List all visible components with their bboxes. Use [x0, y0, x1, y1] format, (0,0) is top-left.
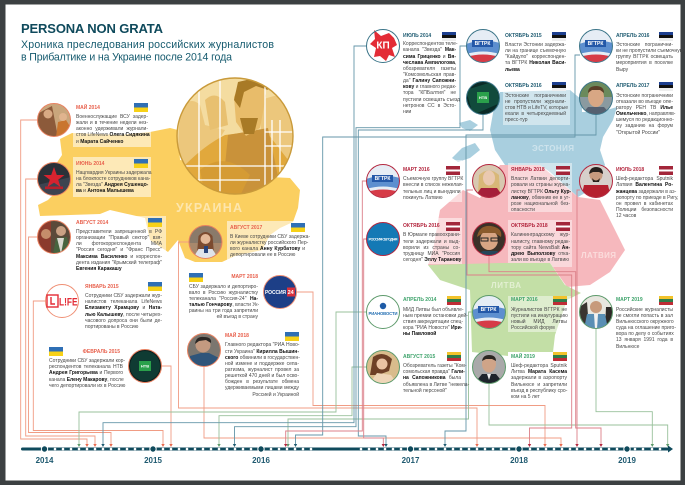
card: April 2014: МИД Литвы был объявле-: [403, 307, 464, 313]
photo: August 2015: [366, 350, 400, 384]
card: May 2018: Россией и Украиной: [252, 392, 299, 398]
card: May 2018: сти Украина" Кирилла Вышин-: [225, 349, 299, 355]
card: May 2014: стов LifeNews Олега Сидякина: [76, 132, 150, 138]
card: July 2018: Шеф-редактора Sputnik: [616, 176, 673, 182]
card: May 2018: ского обвинили в государствен-: [225, 355, 300, 361]
card: July 2018: Латвия Валентина Ро-: [616, 182, 673, 188]
card: October 2018: [511, 222, 570, 263]
card: February 2015: Андрея Григорьева и Первого: [49, 370, 123, 376]
card: March 2019: [616, 296, 676, 350]
card: May 2014: МАЙ 2014: [76, 104, 100, 110]
map labels: ЭСТОНИЯ: [532, 144, 574, 153]
card: May 2018: Главного редактора "РИА Ново-: [225, 342, 299, 348]
card: July 2014: тора "КПБалтия" не: [403, 90, 456, 96]
card: October 2018: зали во въезде в Латвию: [511, 257, 569, 263]
card: March 2016 Lithuania: пустили на инаугурацию: [511, 313, 568, 319]
card: January 2018: ЯНВАРЬ 2018: [511, 167, 545, 173]
card: March 2018: ей въезд в страну: [217, 314, 258, 320]
logo: Rossiya Segodnya: [366, 222, 400, 256]
card: August 2015: Обозреватель газеты "Ком-: [403, 363, 466, 369]
card: October 2015: ли на границе съемочную: [505, 48, 566, 54]
photo: Zvezda logo: [37, 162, 71, 196]
card: March 2016 Latvia: МАРТ 2016: [403, 167, 430, 173]
map: Ukraine: [38, 100, 307, 273]
card: May 2018: ной измене и поддержке сепа-: [225, 361, 299, 367]
card: March 2018: телеканала "Россия-24" На-: [189, 296, 258, 302]
card: August 2014: "Россия сегодня" и "Франс Пресс": [76, 247, 162, 253]
card: May 2014: аконно удерживали журнали-: [76, 126, 148, 132]
photo: July 2018: [579, 164, 613, 198]
photo: May 2018: [187, 333, 221, 367]
card: July 2018: 12 часов: [616, 213, 636, 219]
card: October 2018: Калининградскому жур-: [511, 232, 570, 238]
card: May 2019: Литва Марата Касема: [511, 369, 567, 375]
card: August 2017: [230, 223, 310, 258]
timeline: [22, 446, 673, 465]
card: April 2014: кора "РИА Новости" Ири-: [403, 325, 462, 331]
card: January 2018: опасности: [511, 207, 535, 213]
card: April 2016 Estonia: Эстонские погранични-: [616, 42, 673, 48]
card: April 2016 Estonia: АПРЕЛЬ 2016: [616, 33, 649, 39]
card: January 2018: листку ВГТРК Ольгу Кур-: [511, 188, 571, 194]
card: January 2015: Сотрудники СБУ задержали жур-: [85, 293, 162, 299]
card: August 2015: объявлена в Литве "нежела-: [403, 382, 469, 388]
card: March 2018: [189, 273, 259, 320]
card: June 2014: [76, 159, 152, 194]
card: August 2014: ли фотокорреспондента МИА: [76, 241, 162, 247]
card: January 2015: [85, 282, 162, 330]
card: August 2014: АВГУСТ 2014: [76, 220, 108, 226]
card: October 2016 Estonia: ОКТЯБРЬ 2016: [505, 83, 542, 89]
photo: March 2019: [579, 295, 613, 329]
card: October 2015: льева: [505, 67, 520, 73]
card: July 2014: сима Гриценко и Вя-: [403, 54, 456, 60]
map labels: ЛАТВИЯ: [581, 251, 616, 260]
logo: Russia 24: [264, 276, 296, 308]
card: March 2019: не смогли попасть в зал: [616, 313, 673, 319]
logo: VGTRK March 2016 Lithuania: ВГТРК: [481, 307, 497, 313]
card: March 2016 Lithuania: [511, 296, 568, 331]
photo: October 2018: [472, 222, 506, 256]
card: March 2019: Вильнюсского окружного: [616, 319, 674, 325]
card: October 2016 Latvia: трудницу МИА "Россия: [403, 251, 460, 257]
card: January 2015: Елизавету Храмцову и Ната-: [85, 305, 162, 311]
card: August 2014: Евгения Каракашу: [76, 266, 122, 272]
card: August 2017: АВГУСТ 2017: [230, 224, 262, 230]
card: August 2014: Максима Василенко и корреспон-: [76, 254, 162, 260]
connectors: Latvia events: [286, 181, 601, 444]
card: April 2016 Estonia: Выру: [616, 67, 628, 73]
map labels: [176, 144, 616, 290]
card: July 2018: он провел в кабинетах: [616, 201, 673, 207]
card: October 2016 Estonia: стов НТВ и LifeTV, которые: [505, 105, 568, 111]
card: March 2019: МАРТ 2019: [616, 297, 643, 303]
timeline: 2014: [36, 456, 54, 465]
card: August 2017: ли журналистку российского Пер-: [230, 240, 308, 246]
timeline: 2017: [402, 456, 420, 465]
logo: VGTRK March 2016 Latvia: ВГТРК: [375, 176, 391, 182]
card: April 2017: му заданию на форум: [616, 123, 673, 129]
card: January 2015: портированы в Россию: [85, 324, 138, 330]
map: Estonia: [452, 88, 617, 197]
timeline: 2018: [510, 456, 528, 465]
card: July 2014: пустили освещать съезд: [403, 97, 460, 103]
card: February 2015: ФЕВРАЛЬ 2015: [83, 349, 120, 355]
card: March 2019: вора по делу о событиях: [616, 331, 674, 337]
card: May 2019: въезд в республику сро-: [511, 388, 567, 394]
card: April 2016 Estonia: мероприятия в поселке: [616, 60, 673, 66]
card: May 2019: [511, 352, 568, 400]
card: April 2014: ны Павловой: [403, 331, 436, 337]
card: July 2018: Полиции безопасности: [616, 207, 673, 213]
card: March 2016 Lithuania: Российской форум: [511, 325, 555, 331]
card: March 2016 Latvia: внесли в список нежелая-: [403, 182, 463, 188]
card: July 2018: жанцева задержали в аэ-: [616, 188, 676, 194]
card: May 2018: ратизма, журналист провел за: [225, 367, 299, 373]
card: July 2014: кову и главного редак-: [403, 84, 456, 90]
card: March 2016 Lithuania: новый МИД Литвы: [511, 319, 567, 325]
card: July 2014: Корреспондентов теле-: [403, 41, 458, 47]
card: March 2018: раины на три года запретили: [189, 308, 258, 314]
card: January 2015: часового допроса они были де-: [85, 318, 162, 324]
card: April 2017: "Открытой России": [616, 130, 660, 136]
card: January 2018: [511, 166, 571, 213]
card: March 2016 Lithuania: Журналистов ВГТРК не: [511, 307, 567, 313]
card: August 2015: [403, 352, 470, 394]
card: May 2018: удерживаемыми лицами между: [225, 385, 299, 391]
card: August 2017: депортировали ее в Россию: [230, 252, 295, 258]
connectors: Lithuania events: [79, 312, 668, 444]
card: October 2016 Estonia: пресс-тур: [505, 117, 528, 123]
map: Lithuania: [400, 263, 581, 400]
title: PERSONA NON GRATA: [21, 21, 164, 36]
card: October 2018: дрею Выползову отка-: [511, 251, 570, 257]
title: в Прибалтике и на Украине после 2014 года: [21, 52, 232, 64]
card: October 2015: та ВГТРК Николая Васи-: [505, 60, 566, 66]
card: April 2017: шемуся по редакционно-: [616, 117, 674, 123]
card: May 2014: и Марата Сайченко: [76, 139, 123, 145]
card: July 2014: да" Галину Сапожни-: [403, 78, 456, 84]
card: May 2018: божден в результате обмена: [225, 379, 299, 385]
card: July 2014: "Комсомольская прав-: [403, 72, 456, 78]
card: August 2014: организации "Правый сектор" взя-: [76, 235, 162, 241]
card: April 2017: [616, 82, 676, 136]
photo: January 2018: [472, 164, 506, 198]
card: October 2016 Latvia: ОКТЯБРЬ 2016: [403, 223, 440, 229]
logo: VGTRK October 2015: ВГТРК: [475, 41, 491, 47]
central illustration ring: [177, 78, 293, 194]
card: May 2018: решеткой 470 дней и был осво-: [225, 373, 299, 379]
card: October 2015: "Кайдуло" корреспонден-: [505, 54, 566, 60]
card: May 2014: жали и в течение недели нез-: [76, 120, 148, 126]
card: May 2019: ком на 5 лет: [511, 394, 540, 400]
card: March 2018: СБУ задержало и депортиро-: [189, 284, 258, 290]
timeline: 2016: [252, 456, 270, 465]
card: June 2014: ва и Антона Малышева: [76, 188, 134, 194]
photo: April 2017: [579, 81, 613, 115]
card: October 2018: ОКТЯБРЬ 2018: [511, 223, 548, 229]
card: February 2015: чего депортировали их в Россию: [49, 383, 125, 389]
card: August 2015: АВГУСТ 2015: [403, 354, 435, 360]
card: May 2018: МАЙ 2018: [225, 333, 249, 339]
card: February 2015: Сотрудники СБУ задержали кор-: [49, 358, 125, 364]
logo: RIA Novosti: РИАНОВОСТИ: [368, 311, 398, 316]
card: October 2015: [505, 32, 566, 73]
card: March 2018: вало в Россию журналистку: [189, 290, 258, 296]
title: Хроника преследования российских журналистов: [21, 39, 274, 51]
card: January 2018: ровали из страны журна-: [511, 182, 570, 188]
map labels: ЛИТВА: [491, 281, 521, 290]
logo: VGTRK April 2016: ВГТРК: [588, 41, 604, 47]
card: July 2014: канала "Звезда" Мак-: [403, 47, 456, 53]
card: July 2014: [403, 32, 460, 115]
logo: VGTRK October 2015: [466, 29, 500, 63]
card: August 2017: вого канала Анну Курбатову и: [230, 246, 305, 252]
connectors: Estonia events: [103, 46, 596, 444]
card: May 2019: Шеф-редактора Sputnik: [511, 363, 567, 369]
card: March 2019: Российские журналисты: [616, 307, 673, 313]
card: October 2015: ОКТЯБРЬ 2015: [505, 33, 542, 39]
central illustration: journalist behind bars: [178, 78, 292, 194]
card: June 2014: ла "Звезда" Андрея Сушенцо-: [76, 182, 148, 188]
card: July 2014: нии: [403, 109, 411, 115]
card: March 2016 Latvia: покинуть Латвию: [403, 195, 442, 201]
photo: August 2014: [37, 220, 71, 254]
card: July 2014: чеслава Ампилогова,: [403, 60, 456, 66]
logo: NTV October 2016: НТВ: [479, 95, 487, 100]
card: March 2016 Latvia: Съемочную группу ВГТРК: [403, 176, 463, 182]
card: October 2016 Estonia: не пропустили журнали-: [505, 99, 566, 105]
card: October 2018: налисту, главному редак-: [511, 239, 570, 245]
card: July 2014: нетронов СС в Эсто-: [403, 103, 456, 109]
card: August 2015: сомольская правда" Гали-: [403, 369, 465, 375]
logo: Russia 24: 24: [288, 290, 295, 296]
card: June 2014: Нацгвардия Украины задержала: [76, 170, 152, 176]
timeline: 2015: [144, 456, 162, 465]
photo: August 2017: [188, 225, 222, 259]
logo: NTV February 2015: НТВ: [141, 364, 149, 368]
card: July 2014: обозревателя газеты: [403, 66, 456, 72]
logo: Russia 24: РОССИЯ: [265, 290, 286, 296]
card: March 2018: талью Гончарову, власти Ук-: [189, 302, 259, 308]
card: October 2016 Latvia: ворили из страны со-: [403, 245, 460, 251]
photo: May 2014: [37, 103, 71, 137]
card: October 2016 Latvia: В Юрмале правоохрани-: [403, 232, 461, 238]
card: October 2016 Latvia: [403, 222, 462, 263]
card: March 2019: суда на оглашение приго-: [616, 325, 676, 331]
card: March 2018: МАРТ 2018: [231, 274, 258, 280]
card: April 2014: [403, 296, 468, 337]
card: April 2017: Омельченко, направляв-: [616, 111, 675, 117]
card: February 2015: [49, 347, 126, 389]
card: April 2014: ствия аккредитации спец-: [403, 319, 463, 325]
card: July 2018: ропорту по приезде в Ригу,: [616, 195, 678, 201]
logo: KP: КП: [376, 40, 390, 52]
card: March 2019: Вильнюсе: [616, 344, 639, 350]
card: October 2015: Власти Эстонии задержа-: [505, 42, 566, 48]
map: Latvia: [400, 160, 625, 287]
card: July 2014: ИЮЛЬ 2014: [403, 33, 431, 39]
card: August 2015: на Сапожникова была: [403, 375, 461, 381]
logo: Rossiya Segodnya: РОССИЯ СЕГОДНЯ: [369, 238, 398, 242]
logo: NTV February 2015: [128, 349, 162, 383]
card: May 2018: [225, 332, 300, 398]
card: January 2018: Власти Латвии депорти-: [511, 176, 570, 182]
title: [21, 21, 274, 64]
arrowheads: [77, 444, 669, 447]
card: October 2016 Estonia: Эстонские пограничники: [505, 93, 566, 99]
logo: RIA Novosti: [366, 296, 400, 328]
card: January 2018: ланову, обвинив ее в уг-: [511, 195, 570, 201]
logo: VGTRK April 2016: [579, 29, 613, 63]
card: August 2017: В Киеве сотрудники СБУ задержа-: [230, 234, 310, 240]
card: February 2015: респондентов телеканала НТВ: [49, 364, 123, 370]
logo: Life: [46, 284, 78, 318]
card: August 2015: тельной персоной": [403, 388, 447, 394]
card: June 2014: ИЮНЬ 2014: [76, 160, 104, 166]
logo: VGTRK March 2016 Lithuania: [472, 295, 506, 329]
card: August 2014: Представители запрещенной в РФ: [76, 229, 162, 235]
card: March 2016 Latvia: [403, 166, 464, 201]
card: May 2014: Военнослужащие ВСУ задер-: [76, 114, 148, 120]
card: March 2016 Lithuania: МАРТ 2016: [511, 297, 538, 303]
card: October 2018: тору сайта NewsBalt Ан-: [511, 245, 570, 251]
card: April 2017: ратору РЕН ТВ Илье: [616, 105, 673, 111]
logo: Life: L!FE: [59, 296, 78, 308]
photo: May 2019: [472, 350, 506, 384]
card: February 2015: канала Елену Макарову, после: [49, 377, 124, 383]
card: October 2016 Estonia: ехали в четырехдневный: [505, 111, 566, 117]
card: January 2015: лью Калышеву, после четырех-: [85, 312, 162, 318]
card: October 2016 Latvia: тели задержали и выд-: [403, 239, 460, 245]
card: August 2014: [76, 218, 162, 272]
card: May 2019: МАЙ 2019: [511, 354, 535, 360]
card: May 2019: Вильнюсе и запретили: [511, 382, 567, 388]
connectors: Ukraine events: [21, 120, 561, 444]
card: March 2019: 13 января 1991 года в: [616, 337, 673, 343]
card: August 2014: дента издания "Крымский телеграф": [76, 260, 162, 266]
card: May 2019: задержали в аэропорту: [511, 375, 567, 381]
timeline: 2019: [618, 456, 636, 465]
card: July 2018: ИЮЛЬ 2018: [616, 167, 644, 173]
logo: NTV October 2016: [466, 81, 500, 115]
logo: VGTRK March 2016 Latvia: [366, 164, 400, 198]
card: January 2015: налистов телеканала LifeNews: [85, 299, 162, 305]
card: June 2014: на блокпосте сотрудников кана-: [76, 176, 150, 182]
card: April 2014: ным премии остановки дей-: [403, 313, 468, 319]
logo: KP: [366, 30, 400, 62]
card: January 2018: розе национальной без-: [511, 201, 570, 207]
card: April 2017: АПРЕЛЬ 2017: [616, 83, 649, 89]
card: October 2016 Estonia: [505, 82, 568, 123]
card: April 2016 Estonia: [616, 32, 684, 73]
card: January 2015: ЯНВАРЬ 2015: [85, 284, 119, 290]
card: March 2016 Latvia: тельных лиц и вынудили: [403, 188, 461, 194]
card: May 2014: [76, 103, 150, 145]
card: April 2017: отказали во въезде опе-: [616, 99, 673, 105]
card: April 2017: Эстонские пограничники: [616, 93, 673, 99]
map labels: УКРАИНА: [176, 201, 242, 215]
card: October 2016 Latvia: сегодня" Эллу Таранову: [403, 257, 461, 263]
card: April 2016 Estonia: ки не пропустили съемочную: [616, 48, 684, 54]
card: April 2014: АПРЕЛЬ 2014: [403, 297, 436, 303]
card: April 2016 Estonia: группу ВГТРК освещать: [616, 54, 673, 60]
card: July 2018: [616, 166, 678, 219]
